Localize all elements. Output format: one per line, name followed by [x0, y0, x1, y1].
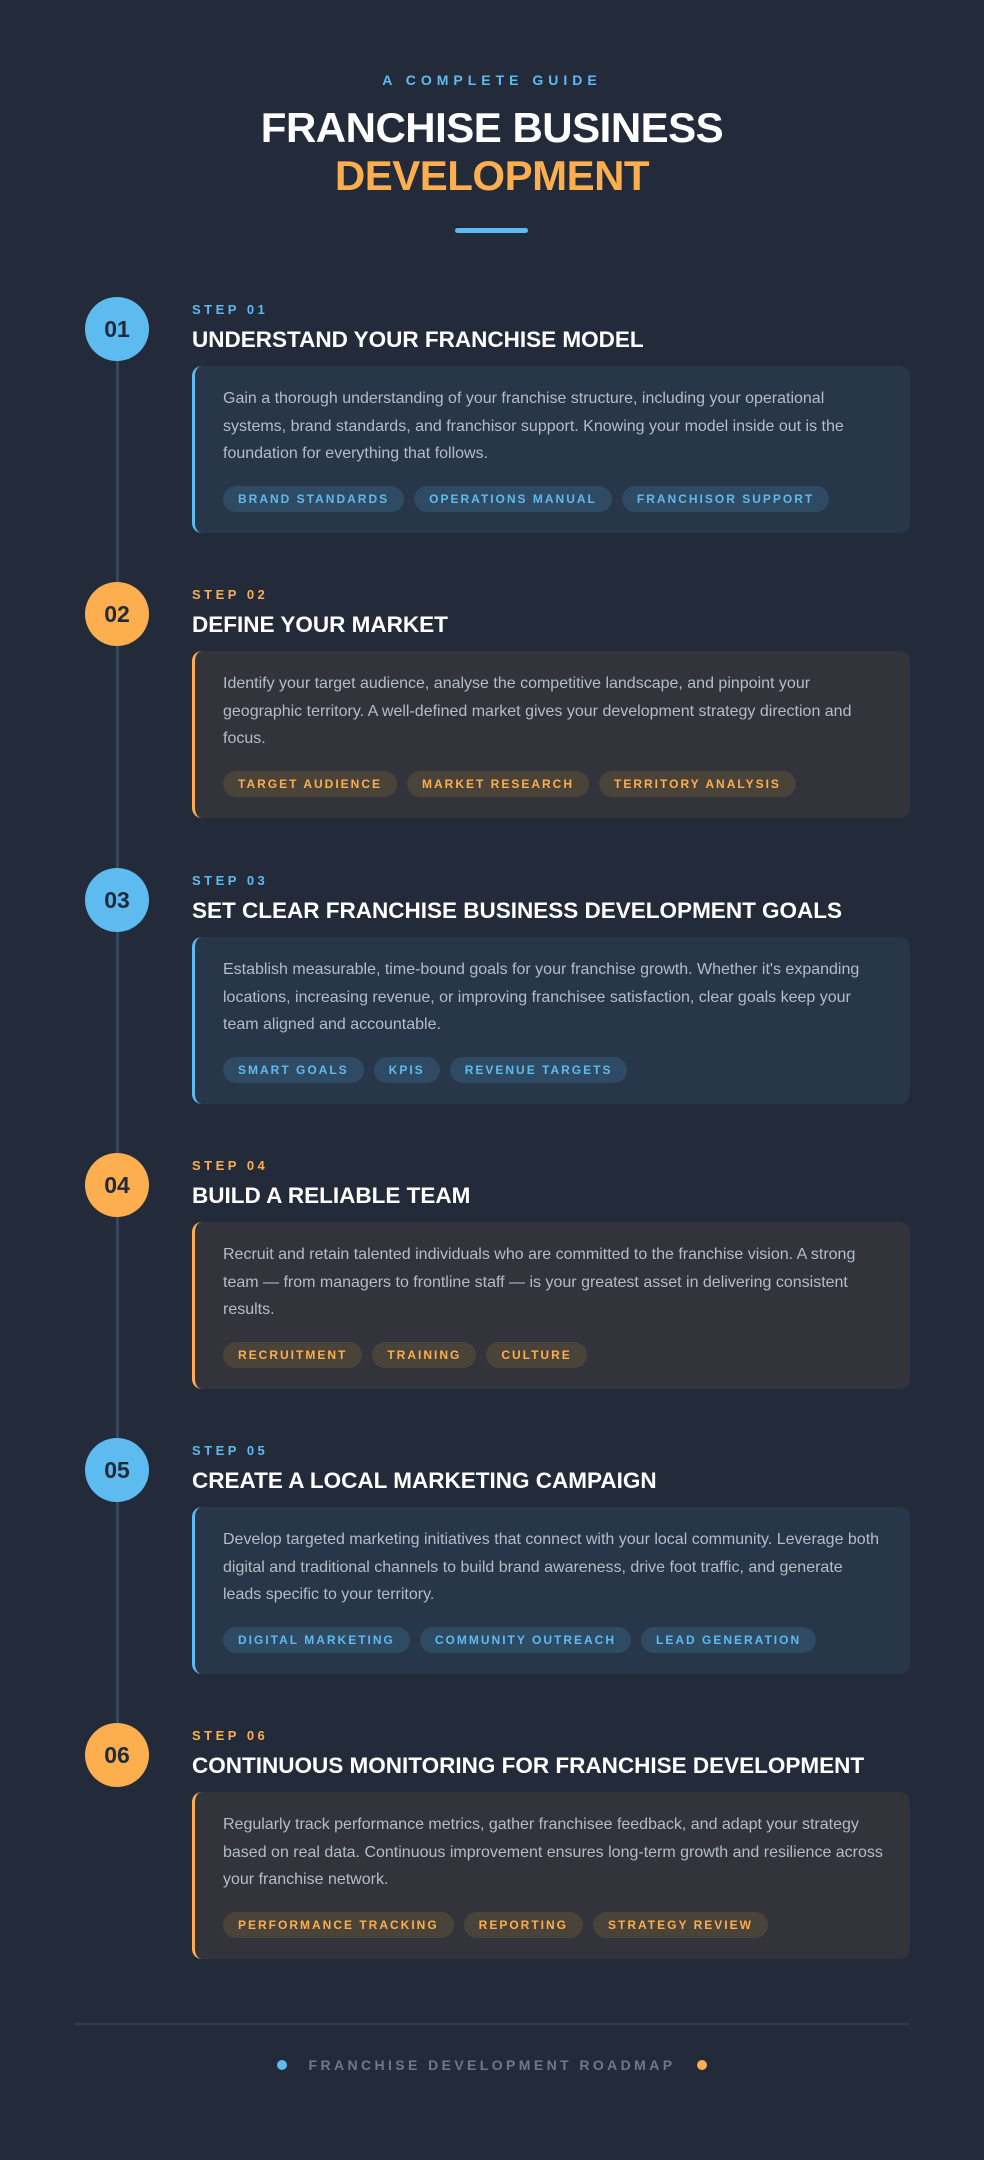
card 05: DIGITAL MARKETING [238, 1632, 395, 1646]
circle 04: 04 [104, 1172, 130, 1198]
timeline line [116, 330, 119, 1756]
step 05: CREATE A LOCAL MARKETING CAMPAIGN [192, 1468, 657, 1493]
card 05: digital and traditional channels to build brand awareness, drive foot traffic, and generate [223, 1558, 843, 1576]
circle 04 [85, 1153, 149, 1217]
card 04 [192, 1222, 910, 1389]
card 03: KPIS [389, 1062, 425, 1076]
card 06: STRATEGY REVIEW [608, 1918, 753, 1932]
card 05: COMMUNITY OUTREACH [435, 1632, 616, 1646]
card 03: REVENUE TARGETS [465, 1062, 612, 1076]
circle 02 [85, 582, 149, 646]
card 05: leads specific to your territory. [223, 1586, 434, 1603]
card 02: geographic territory. A well-defined market gives your development strategy direction and [223, 702, 851, 720]
footer: FRANCHISE DEVELOPMENT ROADMAP [309, 2057, 675, 2073]
step 01: UNDERSTAND YOUR FRANCHISE MODEL [192, 327, 644, 352]
step 03: STEP 03 [192, 873, 268, 888]
circle 06: 06 [104, 1742, 130, 1768]
card 05: Develop targeted marketing initiatives that connect with your local community. Leverage both [223, 1531, 879, 1548]
title: FRANCHISE BUSINESS [261, 104, 723, 151]
title underline [455, 228, 528, 233]
card 01: systems, brand standards, and franchisor support. Knowing your model inside out is the [223, 418, 844, 434]
circle 03: 03 [104, 887, 130, 913]
step 02: DEFINE YOUR MARKET [192, 612, 448, 637]
card 01: BRAND STANDARDS [238, 492, 389, 506]
card 06 [192, 1792, 910, 1959]
card 04: CULTURE [501, 1348, 572, 1362]
card 06: PERFORMANCE TRACKING [238, 1918, 439, 1932]
card 01: OPERATIONS MANUAL [429, 492, 597, 506]
card 03: Establish measurable, time-bound goals for your franchise growth. Whether it's expanding [223, 961, 859, 978]
card 02: TARGET AUDIENCE [238, 776, 382, 790]
step 01 [192, 302, 910, 533]
card 03: SMART GOALS [238, 1062, 349, 1076]
card 05 [192, 1507, 910, 1674]
step 06 [192, 1728, 910, 1959]
card 04: TRAINING [387, 1348, 461, 1362]
card 01 [192, 366, 910, 533]
step 03 [192, 873, 910, 1104]
circle 05 [85, 1438, 149, 1502]
card 04: results. [223, 1301, 275, 1318]
card 04: team — from managers to frontline staff — is your greatest asset in delivering consistent [223, 1274, 848, 1290]
step 01: STEP 01 [192, 302, 268, 317]
step 02: STEP 02 [192, 587, 268, 602]
card 02: TERRITORY ANALYSIS [614, 776, 781, 790]
card 02: MARKET RESEARCH [422, 776, 574, 790]
title [261, 104, 723, 199]
step 06: CONTINUOUS MONITORING FOR FRANCHISE DEVELOPMENT [192, 1753, 864, 1778]
circle 01: 01 [104, 316, 130, 342]
card 01: Gain a thorough understanding of your franchise structure, including your operational [223, 390, 824, 407]
step 04: BUILD A RELIABLE TEAM [192, 1183, 470, 1208]
circle 01 [85, 297, 149, 361]
kicker: A COMPLETE GUIDE [382, 72, 602, 88]
card 06: based on real data. Continuous improvement ensures long-term growth and resilience across [223, 1844, 883, 1860]
title: DEVELOPMENT [335, 152, 649, 199]
circle 03 [85, 868, 149, 932]
step 05: STEP 05 [192, 1443, 268, 1458]
card 02: Identify your target audience, analyse the competitive landscape, and pinpoint your [223, 675, 810, 692]
circle 02: 02 [104, 601, 130, 627]
step 03: SET CLEAR FRANCHISE BUSINESS DEVELOPMENT GOALS [192, 898, 842, 923]
card 06: Regularly track performance metrics, gather franchisee feedback, and adapt your strategy [223, 1816, 859, 1833]
step 02 [192, 587, 910, 818]
card 01: FRANCHISOR SUPPORT [637, 492, 814, 506]
card 02: focus. [223, 730, 266, 747]
step 06: STEP 06 [192, 1728, 268, 1743]
step 05 [192, 1443, 910, 1674]
card 06: your franchise network. [223, 1871, 388, 1888]
card 01: foundation for everything that follows. [223, 445, 488, 462]
step 04 [192, 1158, 910, 1389]
card 02 [192, 651, 910, 818]
step 04: STEP 04 [192, 1158, 268, 1173]
card 03: locations, increasing revenue, or improving franchisee satisfaction, clear goals keep your [223, 988, 851, 1006]
circle 06 [85, 1723, 149, 1787]
card 04: RECRUITMENT [238, 1348, 347, 1362]
card 04: Recruit and retain talented individuals who are committed to the franchise vision. A strong [223, 1246, 855, 1263]
card 05: LEAD GENERATION [656, 1632, 801, 1646]
card 06: REPORTING [479, 1918, 568, 1932]
circle 05: 05 [104, 1457, 130, 1483]
card 03: team aligned and accountable. [223, 1016, 441, 1033]
card 03 [192, 937, 910, 1104]
